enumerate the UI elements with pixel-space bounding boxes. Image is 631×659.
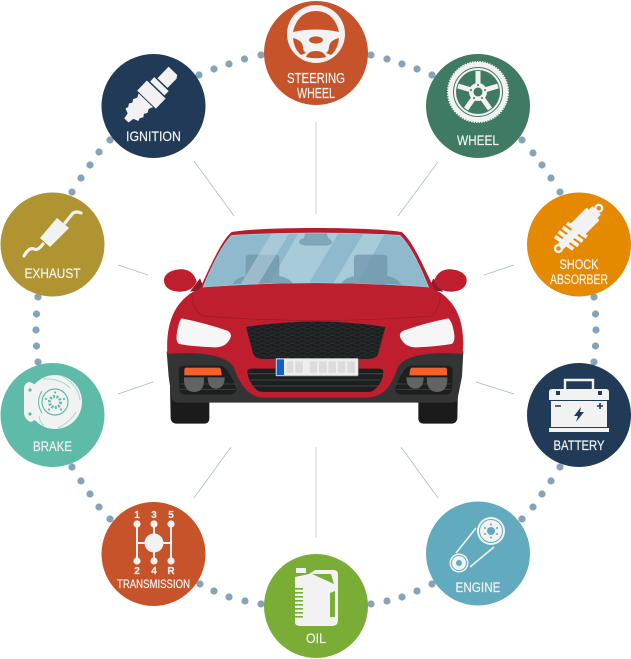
icon: oil canister	[295, 568, 338, 626]
icon: gear shift pattern: 4	[151, 566, 157, 577]
icon: shock absorber	[548, 197, 610, 259]
hood crease	[192, 293, 440, 320]
icon: battery	[549, 380, 609, 432]
label: engine: ENGINE	[456, 579, 500, 595]
badge: brake	[0, 363, 104, 467]
label: transmission: TRANSMISSION	[117, 579, 190, 591]
label: shock absorber: SHOCK	[560, 257, 598, 272]
left headlight	[177, 318, 231, 347]
lower air intake	[247, 369, 383, 392]
icon: exhaust muffler	[24, 212, 81, 256]
label: exhaust: EXHAUST	[24, 265, 81, 281]
licence plate	[276, 358, 358, 376]
badge: transmission	[102, 502, 206, 606]
label: ignition: IGNITION	[126, 128, 181, 144]
car bumper	[167, 352, 463, 403]
label: steering wheel: STEERING	[287, 71, 345, 87]
badge: wheel	[426, 54, 530, 158]
icon: gear shift pattern	[133, 510, 175, 577]
icon: steering wheel	[287, 5, 345, 63]
label: shock absorber: ABSORBER	[550, 272, 608, 287]
icon: spark plug	[117, 63, 183, 129]
car mirrors	[164, 269, 467, 292]
icon: engine belt and pulleys	[450, 517, 505, 572]
car tyres	[170, 387, 458, 424]
label: steering wheel: WHEEL	[297, 86, 335, 102]
car body	[167, 283, 463, 398]
label: steering wheel	[287, 71, 345, 102]
badge: shock absorber	[527, 192, 631, 296]
badge: battery	[527, 363, 631, 467]
badge: ignition	[102, 54, 206, 158]
left fog lamps	[179, 366, 237, 395]
label: shock absorber	[550, 257, 608, 287]
badge: oil	[264, 554, 368, 658]
car cabin roof	[199, 228, 435, 290]
car front view	[164, 228, 467, 424]
label: battery: BATTERY	[554, 437, 605, 453]
label: wheel: WHEEL	[457, 132, 499, 148]
connector lines from car to parts	[118, 122, 514, 538]
label: brake: BRAKE	[33, 438, 72, 454]
left seat	[233, 255, 293, 284]
windshield	[203, 233, 429, 287]
right headlight	[400, 318, 454, 347]
dotted ring connecting the parts	[33, 52, 599, 607]
badge: steering wheel	[264, 1, 368, 105]
badge: engine	[426, 502, 530, 606]
icon: gear shift pattern: R	[167, 566, 175, 577]
label: oil: OIL	[306, 630, 326, 646]
icon: gear shift pattern: 2	[134, 566, 140, 577]
icon: gear shift pattern: 1	[134, 510, 140, 521]
right seat	[341, 255, 401, 285]
icon: brake disc and caliper	[24, 375, 82, 429]
rear view mirror	[299, 233, 332, 246]
icon: alloy wheel	[448, 62, 508, 122]
right fog lamps	[395, 366, 453, 395]
badge: exhaust	[0, 192, 104, 296]
radiator grille	[246, 321, 385, 359]
icon: gear shift pattern: 5	[168, 510, 174, 521]
icon: gear shift pattern: 3	[151, 510, 157, 521]
